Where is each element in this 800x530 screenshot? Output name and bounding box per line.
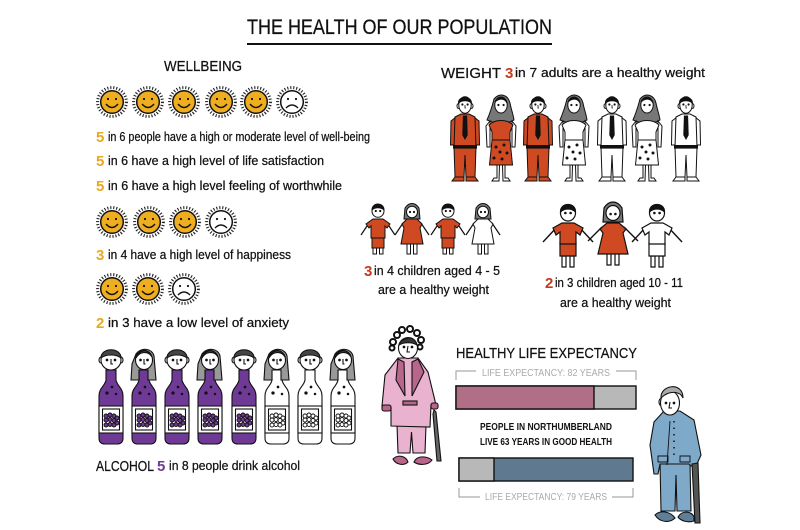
text: worthwhile statistic: 5 — [96, 178, 104, 195]
text: alcohol statistic: ALCOHOL — [96, 458, 154, 475]
text: anxiety statistic: in 3 have a low level of anxiety — [108, 315, 290, 330]
text: happiness statistic: in 4 have a high level of happiness — [108, 247, 291, 262]
text: children aged 4-5 — [364, 263, 500, 297]
children aged 10-11 figures — [543, 202, 682, 267]
adult figures: three of seven coloured — [450, 95, 700, 181]
text: life satisfaction statistic: 5 — [96, 153, 104, 170]
text: alcohol statistic — [96, 458, 300, 475]
heading: healthy life expectancy: HEALTHY LIFE EXPECTANCY — [456, 345, 637, 362]
text: children aged 10-11: 2 — [545, 275, 553, 292]
text: children aged 10-11: are a healthy weight — [560, 295, 671, 310]
text: children aged 10-11 — [545, 275, 683, 310]
text: life satisfaction statistic: in 6 have a high level of life satisfaction — [108, 153, 324, 168]
heading: adult weight — [441, 65, 705, 82]
label: male life expectancy with bracket: LIFE EXPECTANCY: 79 YEARS — [485, 492, 607, 503]
panel: wellbeing — [96, 58, 370, 332]
label: male life expectancy with bracket — [459, 488, 633, 503]
panel: weight — [361, 65, 705, 310]
bar: male healthy years — [459, 458, 633, 481]
heading: adult weight: 3 — [505, 65, 513, 82]
heading: wellbeing: WELLBEING — [164, 58, 242, 75]
text: well-being statistic: in 6 people have a high or moderate level of well-being — [108, 129, 370, 144]
text: Northumberland healthy years — [480, 422, 612, 448]
bottle figures: five of eight coloured — [99, 349, 355, 444]
text: Northumberland healthy years: LIVE 63 YEARS IN GOOD HEALTH — [480, 437, 612, 448]
heading: adult weight: in 7 adults are a healthy weight — [515, 65, 705, 80]
panel: healthy life expectancy — [382, 326, 701, 523]
title: THE HEALTH OF OUR POPULATION — [247, 16, 552, 39]
text: alcohol statistic: in 8 people drink alcohol — [169, 458, 300, 473]
children aged 4-5 figures — [361, 204, 500, 254]
text: children aged 10-11: in 3 children aged 10 - 11 — [555, 275, 683, 290]
text: children aged 4-5: are a healthy weight — [378, 282, 489, 297]
figure: older woman — [382, 326, 441, 464]
label: female life expectancy with bracket: LIFE EXPECTANCY: 82 YEARS — [482, 368, 610, 379]
text: anxiety statistic: 2 — [96, 315, 104, 332]
figure: older man — [650, 387, 701, 523]
bar: female healthy years — [456, 386, 636, 409]
text: children aged 4-5: 3 — [364, 263, 372, 280]
text: Northumberland healthy years: PEOPLE IN NORTHUMBERLAND — [480, 422, 612, 433]
text: children aged 4-5: in 4 children aged 4 - 5 — [374, 263, 500, 278]
text: alcohol statistic: 5 — [157, 458, 165, 475]
icon row: three happy suns and one sad sun — [98, 208, 235, 236]
text: well-being statistic: 5 — [96, 129, 104, 146]
panel: alcohol — [96, 349, 355, 475]
text: happiness statistic: 3 — [96, 247, 104, 264]
icon row: two happy suns and one sad sun — [98, 275, 198, 303]
icon row: five happy suns and one sad sun — [98, 88, 306, 116]
heading: adult weight: WEIGHT — [441, 65, 501, 82]
text: worthwhile statistic: in 6 have a high level feeling of worthwhile — [108, 178, 342, 193]
